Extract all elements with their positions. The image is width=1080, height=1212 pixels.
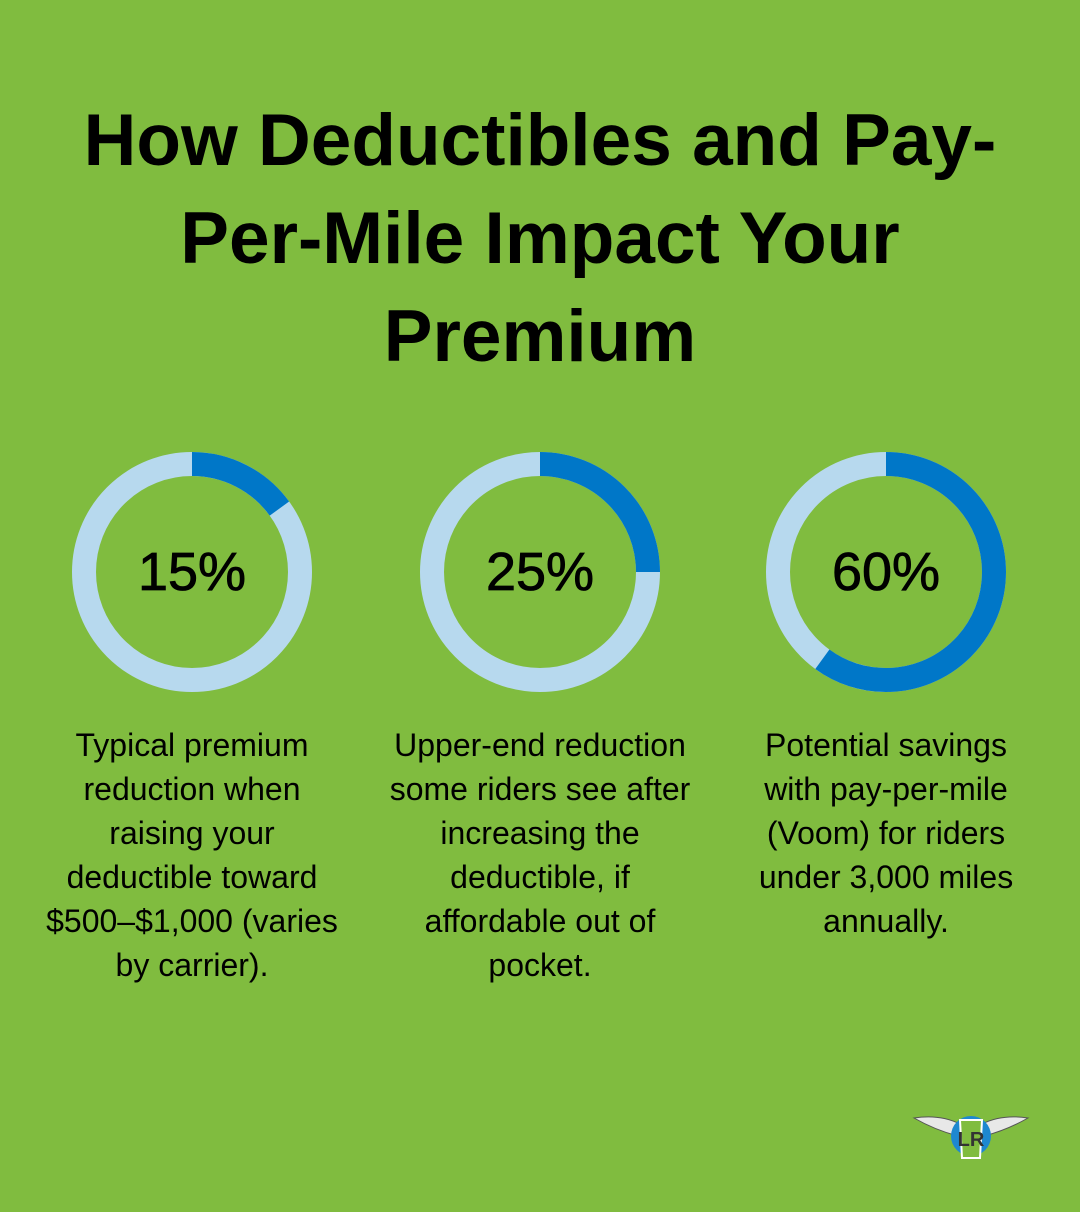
text: 60% description: under 3,000 miles [759,859,1013,895]
text: 25% description: Upper-end reduction [394,727,686,763]
text: 15% description: raising your [109,815,275,851]
donut: 15%: 15% [138,542,246,602]
logo [912,1116,1030,1159]
text: 25% description [390,727,690,983]
text: 25% description: pocket. [488,947,592,983]
text: 15% description [46,727,338,983]
text: 60% description: (Voom) for riders [767,815,1005,851]
text: 15% description: reduction when [83,771,301,807]
donut: 25%: 25% [486,542,594,602]
logo: LR [958,1129,985,1151]
text: 60% description [759,727,1013,939]
text: 25% description: deductible, if [450,859,630,895]
text: 25% description: some riders see after [390,771,690,807]
title: How Deductibles and Pay- [84,100,996,181]
text: 60% description: annually. [823,903,949,939]
text: 25% description: increasing the [440,815,640,851]
donut: 60% [766,452,1006,692]
text: 15% description: deductible toward [67,859,317,895]
donut: 25% [420,452,660,692]
title: Premium [384,296,696,377]
text: 15% description: $500–$1,000 (varies [46,903,338,939]
text: 15% description: by carrier). [116,947,268,983]
text: 25% description: affordable out of [425,903,655,939]
text: 15% description: Typical premium [76,727,308,763]
title [84,100,996,377]
title: Per-Mile Impact Your [180,198,900,279]
donut: 60%: 60% [832,542,940,602]
text: 60% description: with pay-per-mile [764,771,1008,807]
donut: 15% [72,452,312,692]
text: 60% description: Potential savings [765,727,1007,763]
